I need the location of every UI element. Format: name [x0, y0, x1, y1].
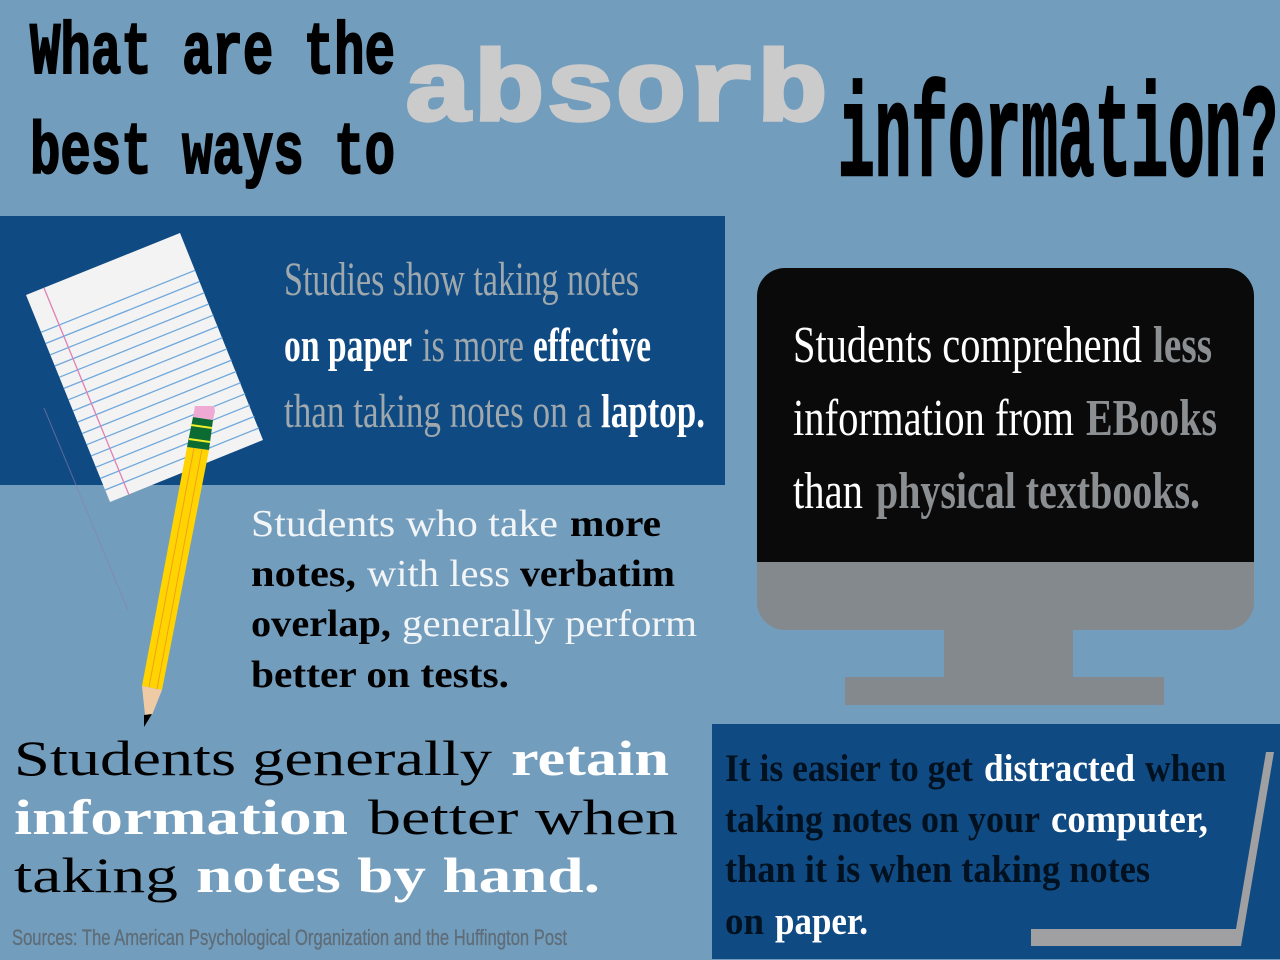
text: more notes perform better: Students who take	[251, 503, 558, 545]
text: distraction on computer: computer,	[1051, 798, 1208, 841]
icon: desktop monitor	[757, 268, 1254, 705]
text: distraction on computer: taking notes on your	[725, 798, 1040, 841]
text: retain information by hand: taking	[14, 847, 178, 903]
text: studies show notes on paper: is more	[422, 319, 524, 372]
text: ebooks comprehension: information from	[793, 390, 1074, 447]
text: retain information by hand: Students generally	[14, 730, 492, 786]
text: distraction on computer: paper.	[775, 900, 868, 943]
text: studies show notes on paper: laptop.	[601, 385, 705, 438]
text: studies show notes on paper: effective	[533, 319, 651, 372]
text: more notes perform better	[251, 503, 697, 696]
icon: pencil	[142, 406, 215, 727]
text: studies show notes on paper	[284, 253, 705, 438]
text: distraction on computer	[725, 747, 1226, 943]
sources: Sources: The American Psychological Organization and the Huffington Post	[12, 925, 567, 950]
text: ebooks comprehension: less	[1153, 317, 1212, 374]
title: What are the	[30, 12, 395, 95]
title	[30, 12, 1278, 215]
text: studies show notes on paper: Studies show taking notes	[284, 253, 639, 306]
text: distraction on computer: when	[1145, 747, 1226, 790]
text: studies show notes on paper: on paper	[284, 319, 412, 372]
text: distraction on computer: It is easier to get	[725, 747, 973, 790]
text: ebooks comprehension: EBooks	[1086, 390, 1217, 447]
icon: lined notebook paper	[26, 233, 263, 502]
text: distraction on computer: than it is when taking notes	[725, 848, 1150, 891]
title: best ways to	[30, 112, 395, 195]
text: ebooks comprehension: than	[793, 463, 863, 520]
text: retain information by hand: notes by hand.	[196, 847, 600, 903]
text: retain information by hand: information	[14, 789, 348, 845]
text: distraction on computer: distracted	[984, 747, 1135, 790]
text: studies show notes on paper: than taking notes on a	[284, 385, 592, 438]
text: ebooks comprehension: Students comprehend	[793, 317, 1142, 374]
panel: notes on paper	[0, 216, 725, 485]
text: retain information by hand	[14, 730, 678, 903]
text: distraction on computer: on	[725, 900, 764, 943]
text: retain information by hand: better when	[368, 789, 678, 845]
text: more notes perform better: better on tests.	[251, 654, 509, 696]
text: more notes perform better: verbatim	[520, 553, 675, 595]
text: ebooks comprehension	[793, 317, 1217, 520]
text: more notes perform better: more	[570, 503, 661, 545]
text: more notes perform better: with less	[367, 553, 510, 595]
panel: distraction	[712, 724, 1280, 959]
text: more notes perform better: notes,	[251, 553, 356, 595]
title: absorb	[403, 38, 828, 151]
text: retain information by hand: retain	[511, 730, 669, 786]
text: more notes perform better: overlap,	[251, 603, 391, 645]
text: more notes perform better: generally perform	[402, 603, 697, 645]
icon: laptop outline	[1031, 752, 1274, 946]
